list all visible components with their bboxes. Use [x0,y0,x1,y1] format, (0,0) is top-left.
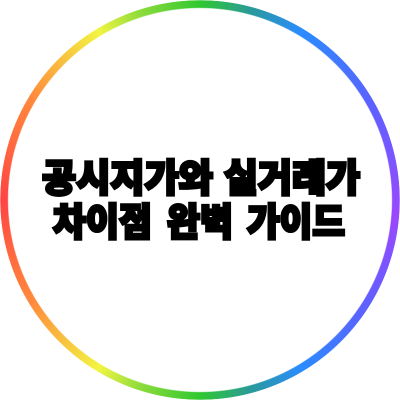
title line 2: 완벽 [167,202,233,244]
title line 2: 가이드 [247,202,345,244]
title line 1: 공시지가와 [42,158,213,200]
title line 1: 실거래가 [224,158,360,200]
title line 2 [53,202,345,244]
title line 2: 차이점 [53,202,152,244]
title line 1 [42,158,360,200]
